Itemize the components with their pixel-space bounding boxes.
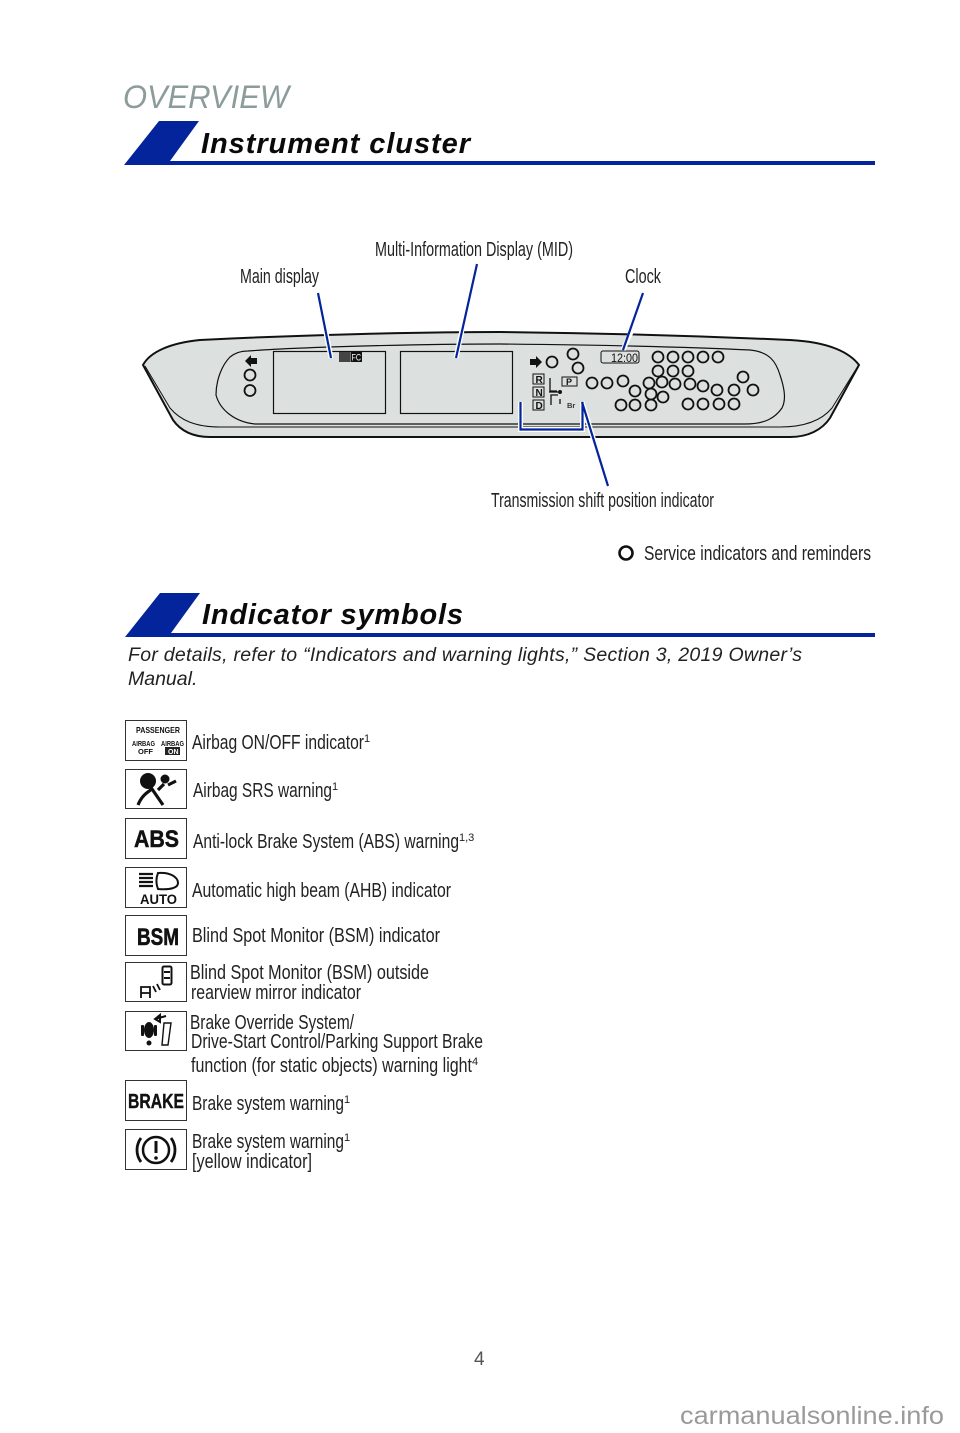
indicator row: brake: Brake system warning [192,1093,344,1115]
main display window [274,352,386,414]
PWR mode and FC icons: FC [352,352,361,362]
indicator row: airbag on/off: PASSENGER [136,725,180,735]
PWR mode and FC icons [339,352,362,362]
indicator row: brake override [126,1012,489,1077]
indicator row: BSM: BSM [137,924,179,951]
MID window [400,352,512,414]
clock display: 12:00 [611,351,638,365]
indicator row: brake yellow [126,1130,350,1173]
indicator row: brake yellow: Brake system warning [192,1131,344,1153]
indicator row: BSM outside mirror: Blind Spot Monitor (BSM) outside [190,962,429,984]
indicator row: brake: BRAKE [128,1091,184,1113]
indicator row: BSM outside mirror [126,962,435,1004]
intro note: Manual. [128,668,197,690]
intro note: For details, refer to “Indicators and warning lights,” Section 3, 2019 Owner’s [128,644,802,666]
cluster body [143,332,859,437]
indicator row: brake override: function (for static objects) warning light [191,1055,472,1077]
indicator row: brake yellow: 1 [344,1132,350,1144]
indicator row: BSM: Blind Spot Monitor (BSM) indicator [192,925,440,947]
inner panel [216,344,784,424]
shift position letters: P [566,377,572,387]
label: main display: Main display [240,266,319,288]
indicator row: brake override: 4 [472,1056,478,1068]
indicator row: BSM outside mirror: rearview mirror indicator [191,982,361,1004]
indicator row: brake [126,1080,350,1120]
indicator row: airbag SRS: 1 [332,781,338,793]
section label: overview: OVERVIEW [123,79,292,115]
indicator row: ABS: Anti-lock Brake System (ABS) warning [193,831,459,853]
indicator row: airbag SRS: Airbag SRS warning [193,780,332,802]
right arrow [530,356,542,368]
indicator row: brake override: Brake Override System/ [190,1012,354,1034]
indicator row: brake: 1 [344,1094,350,1106]
clock display [601,351,639,365]
shift position letters: R [536,375,544,386]
shift position letters [533,374,577,412]
indicator row: airbag on/off: Airbag ON/OFF indicator [192,732,364,754]
indicator row: airbag on/off: 1 [364,733,370,745]
indicator row: ABS: 1,3 [459,832,474,844]
shift position letters: N [536,388,543,399]
instrument cluster diagram [143,264,859,486]
shift position letters: D [536,401,543,412]
page number: 4 [474,1349,485,1370]
heading: indicator symbols: Indicator symbols [202,599,463,631]
heading: indicator symbols [125,593,875,637]
indicator row: AHB [126,868,451,908]
indicator row: airbag on/off: AIRBAG [132,741,155,748]
label: MID: Multi-Information Display (MID) [375,239,573,261]
indicator row: ABS: ABS [134,826,179,853]
label: clock: Clock [625,266,662,288]
legend: service indicators and reminders: Service indicators and reminders [644,543,871,565]
indicator row: ABS [126,818,474,858]
indicator row: BSM [126,916,440,956]
shift position letters: Br [567,401,575,410]
indicator row: airbag on/off: OFF [138,747,153,756]
heading: instrument cluster [124,121,875,165]
indicator row: airbag on/off: ON [168,749,178,756]
indicator row: AHB: AUTO [140,891,177,907]
label: transmission shift position indicator: Transmission shift position indicator [491,490,714,512]
indicator row: AHB: Automatic high beam (AHB) indicator [192,880,451,902]
indicator row: airbag SRS [126,770,338,808]
left arrow and indicators [244,355,257,396]
indicator row: brake yellow: [yellow indicator] [192,1151,312,1173]
heading: instrument cluster: Instrument cluster [201,128,472,160]
service indicator circles [546,348,758,410]
leader lines [318,264,643,486]
indicator row: brake override: Drive-Start Control/Parking Support Brake [191,1031,483,1053]
watermark: carmanualsonline.info [680,1402,944,1430]
indicator row: airbag on/off [126,720,370,760]
indicator row: airbag on/off: AIRBAG [161,741,184,748]
